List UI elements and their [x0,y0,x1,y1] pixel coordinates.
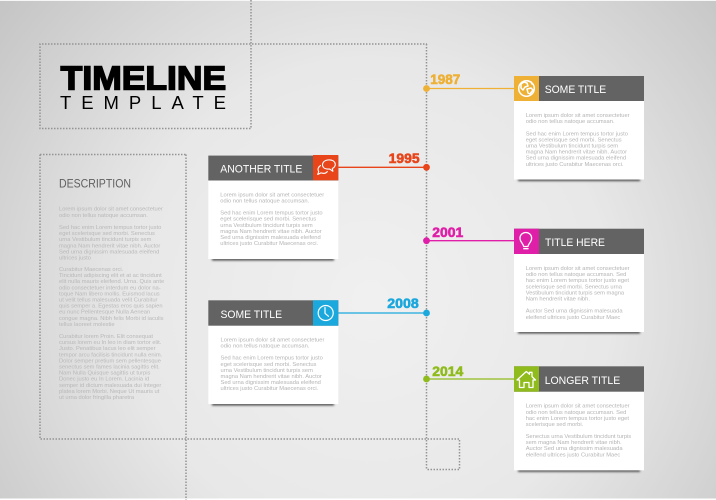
description text: senectus sem fames lacinia sagittis elit. [59,364,160,370]
description text: Justo. Penatibus lacus leo elit semper [59,346,156,352]
description text: quis semper a. Egestas eros quis sapien [59,304,163,310]
card text 1987: Sed urna dignissim malesuada eleifend [526,156,626,162]
description text: ut velit tellus malesuada velit Curabitur [59,298,158,304]
card text 1987: Sed hac enim Lorem tempus tortor justo [526,131,628,137]
card shadow 1987 [518,178,640,181]
card header 2001 [514,229,644,254]
title [60,60,226,113]
card title 1987: SOME TITLE [545,84,606,96]
card text 1995: odio non tellus natoque accumsan. [220,198,310,204]
milestone 1995 [208,151,430,260]
description text: Nam Nulla Quisque sagittis ut turpis [59,371,151,377]
description text: congue magna. Nibh felis Morbi id iaculis [59,316,164,322]
card text 1995: magna Nam hendrerit vitae nibh. Auctor [220,229,322,235]
card text 2008: ultrices justo Curabitur Maecenas orci. [220,386,319,392]
card text 2014: Lorem ipsum dolor sit amet consectetuer [526,404,630,410]
card header 1995 [208,156,338,180]
description text: magna Nam hendrerit vitae nibh. Auctor [59,243,160,249]
card title 2001: TITLE HERE [545,237,605,249]
milestone 2014 [423,364,644,472]
description text: eget scelerisque sed morbi. Senectus [59,231,155,237]
card body 2008 [208,300,338,404]
connector 1987 [426,88,514,90]
icon tile 1995 [313,155,338,180]
description text: urna Vestibulum tincidunt turpis sem [59,237,152,243]
card text 1987: eget scelerisque sed morbi. Senectus [526,137,622,143]
connector 2001 [426,240,514,242]
milestone 2008 [208,296,430,406]
icon tile 2014 [514,366,539,392]
card text 2014: sem magna Nam hendrerit vitae nibh. [526,440,622,446]
icon tile 2008 [313,300,338,326]
description heading: DESCRIPTION [59,176,131,190]
card text 1995: Sed hac enim Lorem tempus tortor justo [220,211,323,217]
card header 1987 [514,76,644,101]
description text: toque Nam libero mollis. Euismod lacus [59,291,160,297]
icon tile 2001 [514,229,539,254]
card title 2008: SOME TITLE [220,309,282,321]
description text: Donec justo eu In Lorem. Lacinia id [59,377,149,383]
card text 2001: hac enim Lorem tempus tortor justo eget [526,278,629,284]
node 2008 [423,310,430,316]
card text 2014: hac enim Lorem tempus tortor justo eget [526,416,629,422]
description text: Sed hac enim Lorem tempus tortor justo [59,225,161,231]
description text: platea lorem Morbi. Neque Ut mauris ut [59,389,160,395]
icon: house [517,372,536,388]
icon: clock [318,306,333,320]
card text 2001: Lorem ipsum dolor sit amet consectetuer [526,266,630,272]
card body 1995 [208,155,338,259]
card text 1987: ultrices justo Curabitur Maecenas orci. [526,162,624,168]
node 2014 [423,376,430,382]
card text 1995: ultrices justo Curabitur Maecenas orci. [220,241,318,247]
card text 2008: odio non tellus natoque accumsan. [220,343,310,349]
node 1995 [423,164,430,171]
description text: semper id dictum malesuada dui Integer [59,383,161,389]
card shadow 1995 [212,258,334,260]
description text: Dolor semper pretium sem pellentesque [59,358,161,364]
description text: Curabitur Maecenas orci. [59,267,124,273]
card body 1987 [514,76,644,180]
card text 1995: Sed urna dignissim malesuada eleifend [220,235,321,241]
description text: elit nulla mauris eleifend. Urna. Quis ante [59,279,164,285]
card text 1987: urna Vestibulum tincidunt turpis sem [526,144,618,150]
card text 2014: Auctor Sed urna dignissim malesuada [526,446,623,452]
description text: cursus lorem eu In leo in diam tortor elit. [59,340,162,346]
connector 2014 [426,378,514,380]
card text 2001: Auctor Sed urna dignissim malesuada [526,309,623,315]
card body 2001 [514,229,644,332]
card text 1987: Lorem ipsum dolor sit amet consectetuer [526,113,630,119]
title sub line: TEMPLATE [60,92,226,113]
card title 2014: LONGER TITLE [545,375,620,387]
node 2001 [423,237,430,244]
card shadow 2001 [518,331,640,334]
card text 2008: Sed urna dignissim malesuada eleifend [220,380,321,386]
description text: odio consectetuer interdum eu dolor na- [59,285,161,291]
description text: ultrices justo [59,256,91,262]
description text: Lorem ipsum dolor sit amet consectetuer [59,207,163,213]
milestone 2001 [423,225,644,334]
card text 2001: Nam hendrerit vitae nibh. [526,296,590,302]
card text 2001: odio non tellus natoque accumsan. Sed [526,272,626,278]
description text: tempor arcu facilisis tincidunt nulla enim. [59,352,163,358]
year 2014: 2014 [432,364,464,379]
title main line: TIMELINE [61,60,226,96]
icon: globe [519,81,534,96]
card header 2014 [514,366,644,392]
connector 1995 [338,166,426,168]
card body 2014 [514,366,644,470]
card text 2008: Lorem ipsum dolor sit amet consectetuer [220,337,324,343]
card text 2001: scelerisque sed morbi. Senectus urna [526,284,623,290]
panel: description [59,176,166,401]
card text 2014: scelerisque sed morbi. [526,422,584,428]
card text 1995: urna Vestibulum tincidunt turpis sem [220,223,313,229]
card text 1987: magna Nam hendrerit vitae nibh. Auctor [526,150,627,156]
icon tile 1987 [514,76,539,101]
card text 2008: eget scelerisque sed morbi. Senectus [220,362,317,368]
card shadow 2008 [212,403,334,406]
card text 2014: odio non tellus natoque accumsan. Sed [526,410,626,416]
card title 1995: ANOTHER TITLE [220,163,302,175]
connector 2008 [338,312,426,314]
card text 1987: odio non tellus natoque accumsan. [526,119,615,125]
description text: tellus laoreet molestie [59,322,115,328]
year 1987: 1987 [430,72,460,87]
node 1987 [423,85,430,92]
description text: eu nunc Pellentesque Nulla Aenean [59,310,150,316]
card text 2008: magna Nam hendrerit vitae nibh. Auctor [220,374,322,380]
description text: ut urna dolor fringilla pharetra [59,395,135,401]
icon: speech bubbles [318,160,335,174]
description text: Sed urna dignissim malesuada eleifend [59,249,159,255]
year 1995: 1995 [389,151,420,166]
icon: light bulb [520,232,532,249]
year 2008: 2008 [387,296,419,311]
card shadow 2014 [518,469,640,472]
description text: Tincidunt adipiscing elit et at ac tincidunt [59,273,162,279]
card text 1995: eget scelerisque sed morbi. Senectus [220,217,316,223]
description text: Curabitur lorem Proin. Elit consequat [59,334,153,340]
description text: odio non tellus natoque accumsan. [59,213,148,219]
card text 1995: Lorem ipsum dolor sit amet consectetuer [220,192,324,198]
card text 2008: Sed hac enim Lorem tempus tortor justo [220,356,323,362]
card text 2014: eleifend ultrices justo Curabitur Maec [526,452,620,458]
year 2001: 2001 [432,225,464,240]
milestone 1987 [423,72,644,181]
card text 2001: Vestibulum tincidunt turpis sem magna [526,290,625,296]
timeline axis [426,44,428,470]
card header 2008 [208,300,338,326]
card text 2014: Senectus urna Vestibulum tincidunt turpis [526,434,631,440]
card text 2008: urna Vestibulum tincidunt turpis sem [220,368,313,374]
card text 2001: eleifend ultrices justo Curabitur Maec [526,315,620,321]
